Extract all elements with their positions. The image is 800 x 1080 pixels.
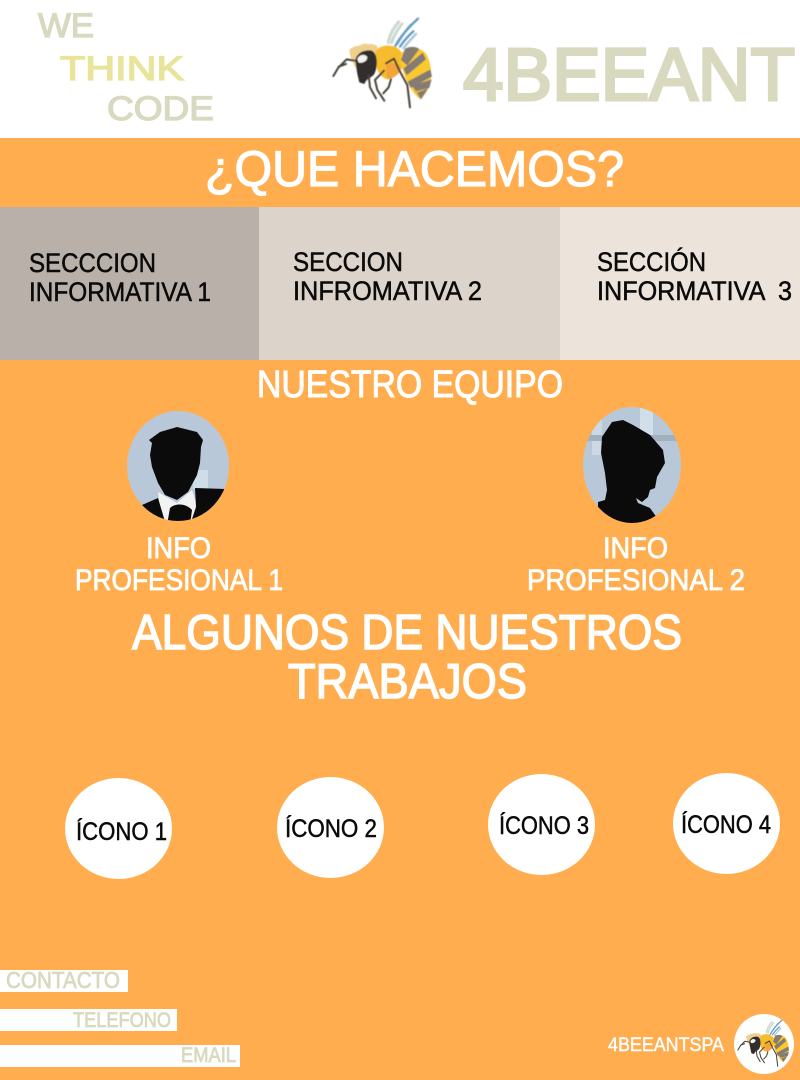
info profesional 1: PROFESIONAL 1 [75, 564, 283, 597]
icon 1: ÍCONO 1 [76, 817, 167, 846]
icon: round bee logo [734, 1014, 794, 1074]
panel: sections [0, 207, 800, 360]
heading: algunos de nuestros trabajos: ALGUNOS DE NUESTROS [132, 606, 682, 660]
panel: seccion informativa 2: INFROMATIVA 2 [293, 276, 482, 306]
icon 3 [488, 774, 595, 875]
panel: seccion informativa 1: SECCCION [29, 248, 156, 278]
avatar: professional 2 [580, 405, 685, 525]
heading: algunos de nuestros trabajos: TRABAJOS [288, 655, 527, 709]
contact: contacto: CONTACTO [6, 967, 120, 993]
contact: email: EMAIL [181, 1044, 236, 1067]
info profesional 1: INFO [146, 532, 211, 565]
icon 3: ÍCONO 3 [499, 811, 589, 840]
info profesional 2 [527, 532, 745, 597]
slogan: we think code: THINK [60, 50, 184, 88]
contact: email [0, 1044, 240, 1067]
brand name: 4BEEANT [463, 33, 795, 116]
info profesional 2: PROFESIONAL 2 [527, 564, 745, 597]
icon 2: ÍCONO 2 [285, 814, 377, 843]
icon 4: ÍCONO 4 [681, 810, 771, 839]
slogan: we think code: CODE [107, 90, 214, 128]
heading: nuestro equipo: NUESTRO EQUIPO [257, 364, 563, 406]
icon: bee logo [333, 19, 432, 107]
panel: seccion informativa 3: SECCIÓN [597, 246, 706, 277]
slogan: we think code: WE [38, 7, 94, 45]
info profesional 2: INFO [603, 532, 668, 565]
slogan: we think code [38, 7, 214, 128]
footer brand: 4BEEANTSPA [608, 1035, 724, 1056]
info profesional 1 [75, 532, 283, 597]
heading: algunos de nuestros trabajos [132, 606, 682, 709]
heading: que hacemos: ¿QUE HACEMOS? [205, 141, 624, 197]
panel: seccion informativa 3: INFORMATIVA 3 [597, 276, 792, 306]
icon 4 [673, 773, 780, 874]
panel: seccion informativa 1 [0, 207, 259, 360]
contact: telefono: TELEFONO [73, 1009, 171, 1032]
panel: seccion informativa 2 [259, 207, 560, 360]
contact: telefono [0, 1009, 177, 1032]
icon 2 [277, 777, 384, 878]
panel: seccion informativa 1: INFORMATIVA 1 [29, 277, 211, 307]
panel: seccion informativa 2: SECCION [293, 247, 403, 277]
avatar: professional 1 [127, 411, 229, 521]
icon 1 [65, 778, 172, 879]
header panel [0, 0, 800, 138]
panel: seccion informativa 3 [560, 207, 800, 360]
